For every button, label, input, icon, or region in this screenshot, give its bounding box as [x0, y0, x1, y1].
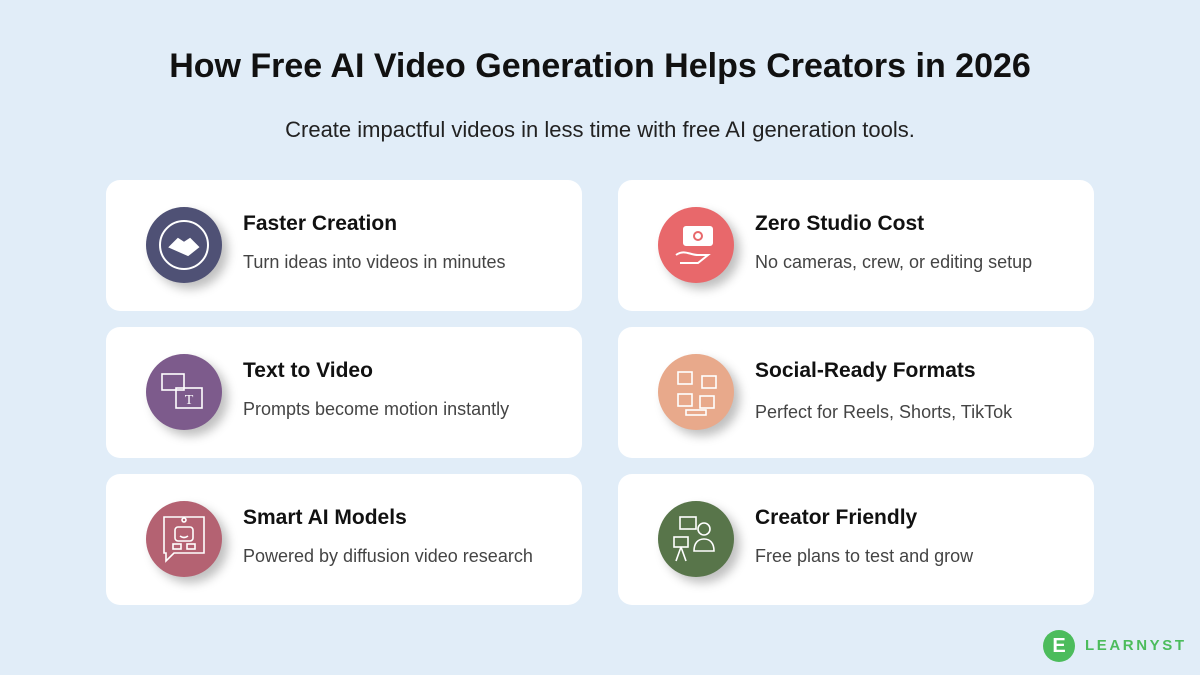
card: Zero Studio Cost — [618, 180, 1094, 311]
card: Text to Video — [106, 327, 582, 458]
text: Powered by diffusion video research — [243, 546, 533, 566]
card: Smart AI Models — [106, 474, 582, 605]
text: Prompts become motion instantly — [243, 399, 509, 419]
title: How Free AI Video Generation Helps Creators in 2026 — [169, 47, 1031, 85]
icon: handshake — [146, 207, 222, 283]
heading: Zero Studio Cost — [755, 212, 924, 235]
text: No cameras, crew, or editing setup — [755, 252, 1032, 272]
logo: Learnyst: E — [1052, 635, 1066, 657]
icon: text video — [146, 354, 222, 430]
icon: money hand — [658, 207, 734, 283]
heading: Creator Friendly — [755, 506, 917, 529]
logo: Learnyst: LEARNYST — [1085, 637, 1187, 654]
heading: Faster Creation — [243, 212, 397, 235]
heading: Text to Video — [243, 359, 373, 382]
icon: social — [658, 354, 734, 430]
icon: text video: T — [185, 393, 194, 408]
heading: Social-Ready Formats — [755, 359, 976, 382]
card: Faster Creation — [106, 180, 582, 311]
heading: Smart AI Models — [243, 506, 407, 529]
icon: robot — [146, 501, 222, 577]
card: Creator Friendly — [618, 474, 1094, 605]
logo: Learnyst — [1043, 630, 1187, 662]
text: Free plans to test and grow — [755, 546, 973, 566]
card: Social-Ready Formats — [618, 327, 1094, 458]
text: Perfect for Reels, Shorts, TikTok — [755, 402, 1012, 422]
text: Turn ideas into videos in minutes — [243, 252, 505, 272]
subtitle: Create impactful videos in less time with free AI generation tools. — [285, 117, 915, 142]
icon: creator — [658, 501, 734, 577]
